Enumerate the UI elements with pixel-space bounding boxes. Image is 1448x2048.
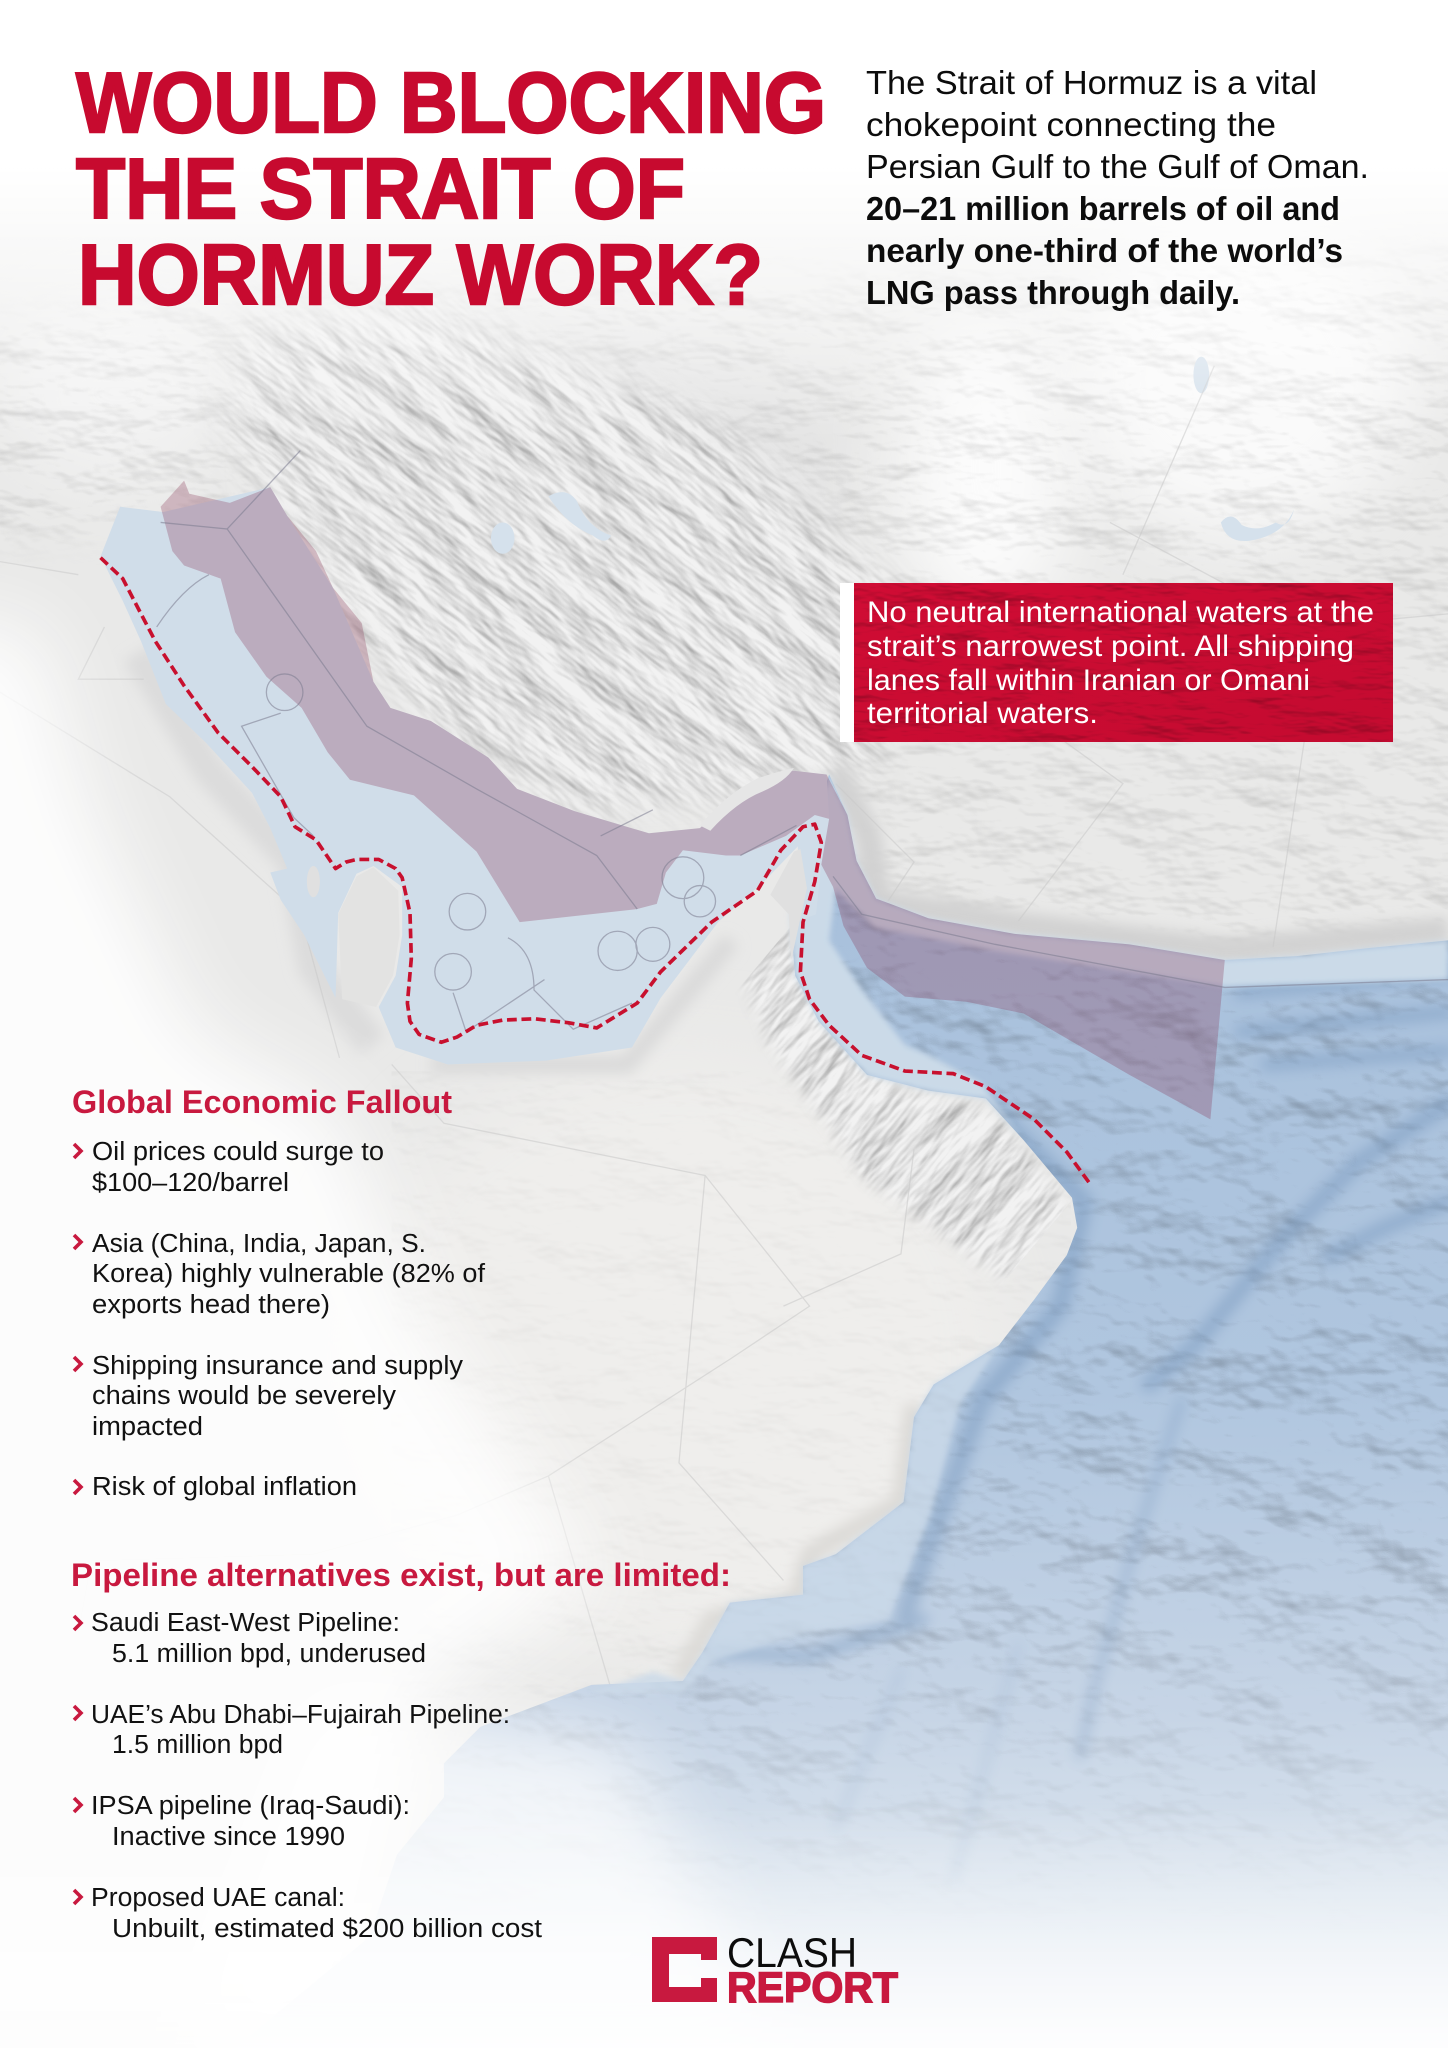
bullet: oil prices: Oil prices could surge to [92, 1138, 384, 1166]
Iranian waters [161, 481, 1225, 1119]
bullet: inflation: Risk of global inflation [92, 1473, 357, 1501]
title [76, 56, 826, 323]
terrain: Zagros mountains [220, 312, 902, 819]
intro paragraph: LNG pass through daily. [866, 275, 1240, 312]
lower-left ocean fade [170, 1685, 783, 2048]
lakes [491, 357, 1294, 554]
bottom fade [0, 1802, 1448, 2048]
bullet: Asia: Asia (China, India, Japan, S. [92, 1230, 426, 1258]
bullet: UAE canal: Unbuilt, estimated $200 billion cost [112, 1915, 542, 1943]
title: WOULD BLOCKING [76, 56, 826, 151]
bullet: UAE canal [74, 1884, 542, 1943]
bullet: Saudi pipeline: 5.1 million bpd, underused [112, 1640, 426, 1668]
terrain: Oman mountains [742, 928, 1065, 1277]
callout: no neutral waters [840, 583, 1393, 742]
Qeshm island [700, 768, 794, 831]
bullet: Asia: Korea) highly vulnerable (82% of [92, 1260, 486, 1288]
callout: no neutral waters: territorial waters. [867, 697, 1098, 730]
logo: Clash Report [652, 1929, 898, 2012]
Arabian Sea and Gulf of Oman [413, 774, 1448, 1916]
Bahrain and Musandam land [307, 849, 807, 960]
bullet: oil prices: $100–120/barrel [92, 1169, 289, 1197]
bullet: IPSA pipeline [74, 1792, 410, 1851]
intro paragraph: The Strait of Hormuz is a vital [866, 65, 1317, 102]
intro paragraph: 20–21 million barrels of oil and [866, 191, 1340, 228]
bullet: Asia: exports head there) [92, 1291, 330, 1319]
callout: no neutral waters: lanes fall within Iranian or Omani [867, 664, 1310, 697]
title: THE STRAIT OF [76, 142, 685, 237]
bullet: Saudi pipeline: Saudi East-West Pipeline: [91, 1609, 400, 1637]
bullet: Asia [74, 1230, 486, 1319]
callout: no neutral waters: No neutral international waters at the [867, 596, 1374, 629]
intro paragraph: nearly one-third of the world’s [866, 233, 1343, 270]
top fade [0, 0, 1448, 444]
bullet: Saudi pipeline [74, 1609, 426, 1668]
title: HORMUZ WORK? [78, 228, 763, 323]
intro paragraph: Persian Gulf to the Gulf of Oman. [866, 149, 1369, 186]
bullet: IPSA pipeline: Inactive since 1990 [112, 1823, 345, 1851]
bullet: UAE pipeline [74, 1701, 510, 1759]
Qatar peninsula [338, 867, 400, 1007]
bullet: UAE pipeline: UAE’s Abu Dhabi–Fujairah Pipeline: [91, 1701, 510, 1729]
logo: Clash Report: REPORT [727, 1964, 898, 2012]
bullet: shipping insurance [74, 1352, 463, 1441]
terrain: eastern and central Iran [0, 292, 1448, 935]
land borders [0, 366, 1448, 1698]
coastal shelf [591, 775, 1448, 1693]
bullet: shipping insurance: Shipping insurance and supply [92, 1352, 463, 1380]
ridge lines [716, 982, 1448, 1759]
seafloor relief [511, 896, 1448, 1844]
coastal lowlands shading [137, 653, 1448, 1678]
left white fade behind text [0, 614, 601, 2048]
shipping route dashed line [101, 558, 1092, 1186]
bullet: oil prices [74, 1138, 384, 1197]
callout: no neutral waters: strait’s narrowest point. All shipping [867, 630, 1354, 663]
logo: Clash Report: CLASH [727, 1929, 857, 1976]
maritime boundaries [157, 451, 1448, 1032]
bullet: UAE pipeline: 1.5 million bpd [112, 1731, 283, 1759]
intro paragraph [866, 65, 1369, 312]
bullet: IPSA pipeline: IPSA pipeline (Iraq-Saudi): [91, 1792, 410, 1820]
terrain: Arabian interior [392, 1071, 1071, 1698]
bullet: shipping insurance: impacted [92, 1413, 203, 1441]
bullet: UAE canal: Proposed UAE canal: [91, 1884, 345, 1912]
intro paragraph: chokepoint connecting the [866, 107, 1276, 144]
heading: pipeline alternatives: Pipeline alternatives exist, but are limited: [71, 1557, 731, 1593]
heading: global economic fallout: Global Economic Fallout [72, 1084, 452, 1120]
Persian Gulf water [101, 487, 829, 1064]
bullet: shipping insurance: chains would be severely [92, 1382, 396, 1410]
